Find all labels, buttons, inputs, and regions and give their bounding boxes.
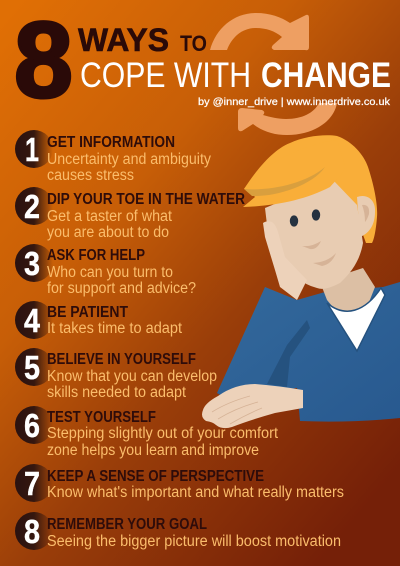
eye left <box>290 215 298 227</box>
item 3 line 2: for support and advice? <box>47 280 196 297</box>
item 1 line 1: Uncertainty and ambiguity <box>47 151 211 168</box>
ear <box>357 196 375 237</box>
item 4 line 1: It takes time to adapt <box>47 320 183 337</box>
item 8 heading: REMEMBER YOUR GOAL <box>47 516 207 533</box>
number 4: 4 <box>24 302 41 339</box>
number disc 4 <box>15 301 53 339</box>
number 8: 8 <box>24 513 40 550</box>
item 6 heading: TEST YOURSELF <box>47 409 156 426</box>
item 7 <box>15 464 344 502</box>
item 5 line 1: Know that you can develop <box>47 368 217 385</box>
item 1 line 2: causes stress <box>47 167 134 184</box>
item 3 heading: ASK FOR HELP <box>47 247 145 264</box>
item 5 <box>15 348 217 401</box>
ear detail <box>362 205 369 222</box>
item 6 <box>15 406 279 459</box>
item 5 line 2: skills needed to adapt <box>47 384 187 401</box>
number 6: 6 <box>24 407 40 444</box>
number disc 5 <box>15 348 53 386</box>
title <box>14 0 391 120</box>
hair fringe <box>243 140 345 207</box>
number 3: 3 <box>24 245 40 282</box>
item 5 heading: BELIEVE IN YOURSELF <box>47 351 196 368</box>
number 7: 7 <box>24 465 40 502</box>
item 1 <box>15 130 211 184</box>
item 2 <box>15 187 245 241</box>
item 6 line 2: zone helps you learn and improve <box>47 442 259 459</box>
number disc 6 <box>15 406 53 444</box>
shirt <box>327 288 385 351</box>
item 8 <box>15 512 341 550</box>
number disc 8 <box>15 512 53 550</box>
number disc 2 <box>15 187 53 225</box>
hair fringe shadow <box>244 167 325 196</box>
neck <box>320 268 375 335</box>
heading: to: TO <box>180 31 207 56</box>
item 4 <box>15 301 183 339</box>
item 1 heading: GET INFORMATION <box>47 134 175 151</box>
item 2 line 1: Get a taster of what <box>47 208 173 225</box>
heading: cope with: COPE WITH <box>80 56 251 95</box>
number 1: 1 <box>25 131 39 168</box>
item 2 line 2: you are about to do <box>47 224 169 241</box>
number 5: 5 <box>24 349 40 386</box>
item 2 heading: DIP YOUR TOE IN THE WATER <box>47 191 245 208</box>
hair back <box>244 135 377 243</box>
eye right <box>312 209 320 221</box>
item 8 line 1: Seeing the bigger picture will boost motivation <box>47 533 341 550</box>
mouth <box>313 253 336 266</box>
item 3 <box>15 244 196 297</box>
number disc 3 <box>15 244 53 282</box>
resting hand <box>202 384 303 428</box>
sweater sleeve fold <box>267 320 310 387</box>
item 6 line 1: Stepping slightly out of your comfort <box>47 425 279 442</box>
icon: refresh arrows <box>210 13 337 135</box>
finger lines <box>212 396 262 424</box>
face <box>265 180 363 289</box>
number 2: 2 <box>24 188 40 225</box>
nose <box>302 241 321 249</box>
sweater <box>217 282 400 422</box>
illustration: thoughtful man <box>202 135 400 428</box>
byline: by @inner_drive | www.innerdrive.co.uk <box>198 96 391 108</box>
number disc 1 <box>15 130 53 168</box>
item 7 heading: KEEP A SENSE OF PERSPECTIVE <box>47 468 264 485</box>
item 3 line 1: Who can you turn to <box>47 264 173 281</box>
number disc 7 <box>15 464 53 502</box>
hand on cheek <box>263 221 307 300</box>
item 7 line 1: Know what's important and what really matters <box>47 484 344 501</box>
heading: ways to: WAYS <box>78 22 169 58</box>
big number 8: 8 <box>14 0 73 120</box>
item 4 heading: BE PATIENT <box>47 304 128 321</box>
